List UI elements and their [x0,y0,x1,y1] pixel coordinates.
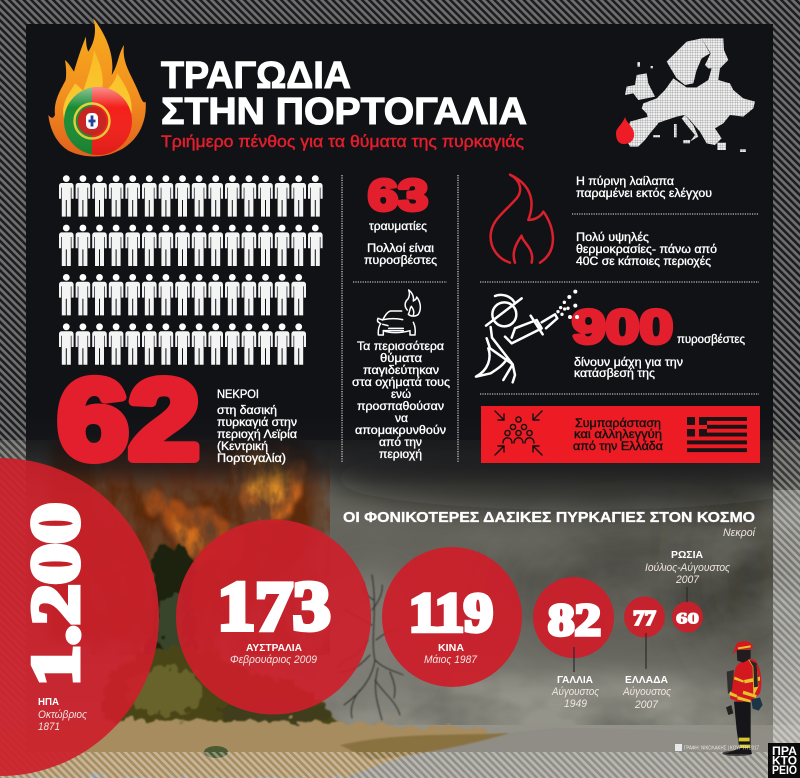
circle: France 82: ΓΑΛΛΙΑ [557,674,593,686]
icon: burning car [378,290,420,335]
fire zone [50,440,318,640]
icon: firefighter with hose [476,290,577,382]
big number: 63 injured: 63 [368,171,428,220]
logo: Πρακτορείο: ΚΤΟ [772,756,797,768]
circle: Russia 60: 2007 [675,574,700,586]
logo: Πρακτορείο: ΡΕΙΟ [772,765,797,777]
background photo: forest fire and smoke [0,440,800,778]
circle: France 82: 1949 [564,698,587,710]
text: victims in vehicles: από την [379,437,422,449]
text: victims in vehicles: παγιδεύτηκαν [363,365,439,377]
credit line: ΓΡΑΦΗ: ΝΙΚΟΛΑΚΗΣ | ΚΟΥΡΤΗ 2017 [684,746,759,752]
text: victims in vehicles [352,341,450,461]
circle: Russia 60: ΡΩΣΙΑ [671,549,703,561]
title: ΤΡΑΓΩΔΙΑ [161,55,351,97]
circle: China 119: Μάιος 1987 [424,654,478,666]
dead tree [338,575,403,720]
circle: Greece 77: 77 [633,606,656,630]
circle: Australia 173: 173 [218,568,330,646]
text: injured [364,221,437,267]
logo: Πρακτορείο: ΠΡΑ [772,746,797,758]
circle: France 82: Αύγουστος [551,686,600,698]
ground and road [0,720,500,778]
big number: 900 firefighters: 900 [572,300,673,353]
text: dead description: πυρκαγιά στην [217,417,297,429]
panel: solidarity from Greece: και αλληλεγγύη [574,429,662,441]
subtitle: Τριήμερο πένθος για τα θύματα της πυρκαγιάς [161,133,524,151]
text: firefighters: δίνουν μάχη για την [574,357,683,369]
photo figure: firefighter [722,641,763,756]
text: dead description: ΝΕΚΡΟΙ [217,389,259,401]
icon: flame with Portuguese flag ball [48,18,146,157]
circle: China 119: 119 [409,583,493,644]
circle: Australia 173: ΑΥΣΤΡΑΛΙΑ [246,642,302,654]
icon: Greek flag [687,417,747,452]
chart heading [343,509,757,539]
circle: USA 1200: ΗΠΑ [38,696,59,708]
text: victims in vehicles: προσπαθούσαν [357,401,444,413]
text: high temperatures [576,232,717,268]
text: victims in vehicles: περιοχή [379,449,422,461]
circle: China 119: ΚΙΝΑ [438,642,464,654]
text: blaze out of control [576,176,712,200]
text: victims in vehicles: Τα περισσότερα [357,341,444,353]
text: firefighters: κατάσβεσή της [574,368,655,380]
map of Europe with fire marker [616,38,755,152]
circle: Greece 77: ΕΛΛΑΔΑ [625,674,668,686]
circle: France 82 [533,577,614,710]
light band under right frame [773,490,800,778]
circle: Greece 77 [622,596,672,711]
text: high temperatures: 40C σε κάποιες περιοχές [576,256,711,268]
text: high temperatures: θερμοκρασίες- πάνω από [576,244,717,256]
text: blaze out of control: Η πύρινη λαίλαπα [576,176,674,188]
logo: Πρακτορείο [768,743,800,778]
text: victims in vehicles: να [395,413,408,425]
panel: solidarity from Greece: από την Ελλάδα [573,441,663,453]
icon: red flame outline [491,175,553,263]
text: dead description: Πορτογαλία) [217,453,286,465]
text: dead description [217,389,297,465]
circle: Australia 173: Φεβρουάριος 2009 [230,654,317,666]
chart heading: ΟΙ ΦΟΝΙΚΟΤΕΡΕΣ ΔΑΣΙΚΕΣ ΠΥΡΚΑΓΙΕΣ ΣΤΟΝ ΚΟΣΜΟ [343,509,755,526]
big number: 62 dead: 62 [58,356,200,482]
text: dead description: στη δασική [217,405,277,417]
hatched frame base [0,0,800,500]
circle: Russia 60: 60 [676,610,699,628]
circle: USA 1200: 1871 [38,721,60,733]
text: dead description: (Κεντρική [217,441,268,453]
text: firefighters: πυροσβέστες [677,334,745,346]
circle: China 119 [382,547,522,687]
text: victims in vehicles: ενώ [391,389,411,401]
text: blaze out of control: παραμένει εκτός ελέγχου [576,188,712,200]
circle: USA 1200: Οκτώβριος [38,709,88,721]
text: firefighters [574,334,745,380]
circle: USA 1200 [0,458,159,776]
text: injured: τραυματίες [369,221,427,233]
panel background [26,24,773,486]
circle: Greece 77: 2007 [634,699,659,711]
credit line [675,744,759,752]
circle: France 82: 82 [548,595,601,645]
title: ΣΤΗΝ ΠΟΡΤΟΓΑΛΙΑ [161,91,527,133]
circle: Russia 60: Ιούλιος-Αύγουστος [645,562,731,574]
icon: group of people with arrows [495,411,542,455]
text: victims in vehicles: απομακρυνθούν [355,425,446,437]
panel: solidarity from Greece [481,406,760,463]
tree and bushes [100,544,340,726]
decorative dotted dividers [342,175,759,462]
text: injured: Πολλοί είναι [367,243,434,255]
text: victims in vehicles: στα οχήματά τους [352,377,450,389]
chart heading: Νεκροί [723,527,757,539]
droplets over number [568,315,579,319]
circle: Russia 60 [645,549,731,632]
circle: USA 1200: 1.200 [17,503,93,686]
circle: Greece 77: Αύγουστος [622,686,672,698]
circle: Australia 173 [176,520,371,714]
text: dead description: περιοχή Λεϊρία [217,429,297,441]
panel: solidarity from Greece: Συμπαράσταση [575,418,661,430]
text: high temperatures: Πολύ υψηλές [576,232,649,244]
pictogram: 62 people [59,175,323,365]
text: victims in vehicles: θύματα [380,353,422,365]
text: injured: πυροσβέστες [364,255,437,267]
title [161,55,527,133]
